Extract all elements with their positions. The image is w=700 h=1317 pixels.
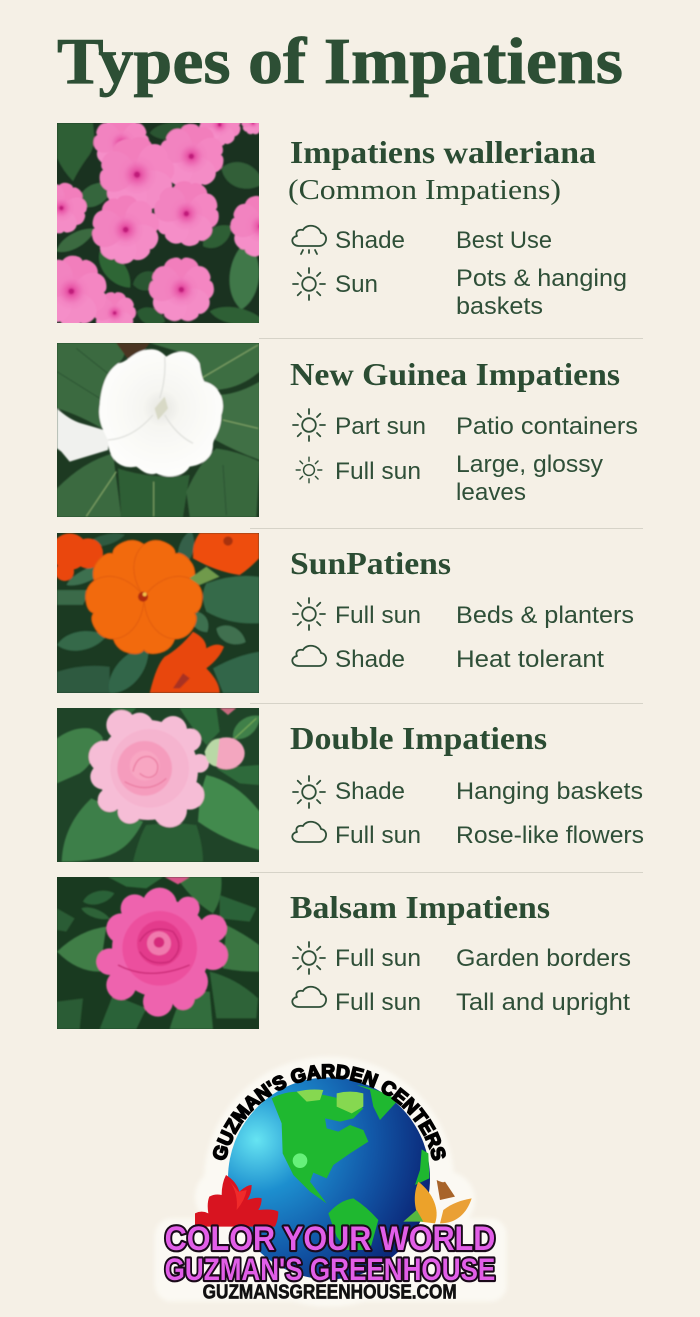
use note: Garden borders	[456, 945, 631, 972]
use note: Pots & hanging	[456, 265, 627, 292]
photo: light pink double impatiens	[57, 708, 259, 862]
panel: Balsam Impatiens	[57, 877, 631, 1029]
panel: Double Impatiens	[57, 708, 644, 862]
feature note: Large, glossy	[456, 451, 603, 478]
panel: Impatiens walleriana	[21, 97, 627, 342]
website: GUZMANSGREENHOUSE.COM	[203, 1281, 457, 1303]
feature note: Rose-like flowers	[456, 822, 644, 849]
photo: white New Guinea impatiens	[57, 343, 259, 517]
globe	[228, 1077, 430, 1279]
title: Types of Impatiens	[57, 25, 623, 98]
label: part sun: Part sun	[335, 413, 426, 440]
label: shade: Shade	[335, 646, 405, 673]
heading: New Guinea Impatiens	[290, 356, 620, 392]
logo: Guzman's Garden Centers	[156, 1058, 506, 1306]
photo: magenta balsam impatiens	[57, 877, 259, 1029]
panel: SunPatiens	[51, 529, 634, 701]
icon: sun	[293, 409, 325, 441]
feature note	[456, 451, 603, 506]
pink text: COLOR YOUR WORLD	[165, 1220, 495, 1258]
icon: red flower	[195, 1175, 278, 1227]
use note: Patio containers	[456, 413, 638, 440]
feature note: Heat tolerant	[456, 646, 604, 673]
icon: cloud	[292, 822, 326, 842]
heading: Impatiens walleriana	[290, 134, 596, 170]
feature note: leaves	[456, 479, 526, 506]
icon: orange flower	[403, 1180, 472, 1223]
label: sun: Sun	[335, 271, 378, 298]
icon: rain cloud	[292, 226, 326, 254]
use note: Beds & planters	[456, 602, 634, 629]
photo: pink common impatiens	[57, 123, 259, 323]
label: full sun: Full sun	[335, 458, 421, 485]
best use text: Best Use	[456, 227, 552, 254]
label: full sun: Full sun	[335, 989, 421, 1016]
icon: cloud	[292, 987, 326, 1007]
label: full sun: Full sun	[335, 822, 421, 849]
pink text	[165, 1220, 495, 1287]
icon: sun	[293, 942, 325, 974]
icon: sun	[293, 776, 325, 808]
label: full sun: Full sun	[335, 945, 421, 972]
icon: sun	[293, 268, 325, 300]
feature note: Tall and upright	[456, 989, 630, 1016]
arched text: GUZMAN'S GARDEN CENTERS	[212, 1064, 446, 1161]
heading: SunPatiens	[290, 545, 451, 581]
panel: New Guinea Impatiens	[57, 343, 638, 517]
use note: baskets	[456, 293, 543, 320]
heading: Balsam Impatiens	[290, 889, 550, 925]
heading: Double Impatiens	[290, 720, 547, 756]
photo: orange SunPatiens	[57, 533, 259, 693]
use note: Hanging baskets	[456, 778, 643, 805]
label: shade: Shade	[335, 227, 405, 254]
label: full sun: Full sun	[335, 602, 421, 629]
label: shade: Shade	[335, 778, 405, 805]
subheading: (Common Impatiens)	[288, 174, 561, 206]
icon: cloud	[292, 646, 326, 666]
icon: sun	[296, 457, 322, 483]
icon: sun	[293, 598, 325, 630]
use note	[456, 265, 627, 320]
pink text: GUZMAN'S GREENHOUSE	[165, 1252, 495, 1287]
